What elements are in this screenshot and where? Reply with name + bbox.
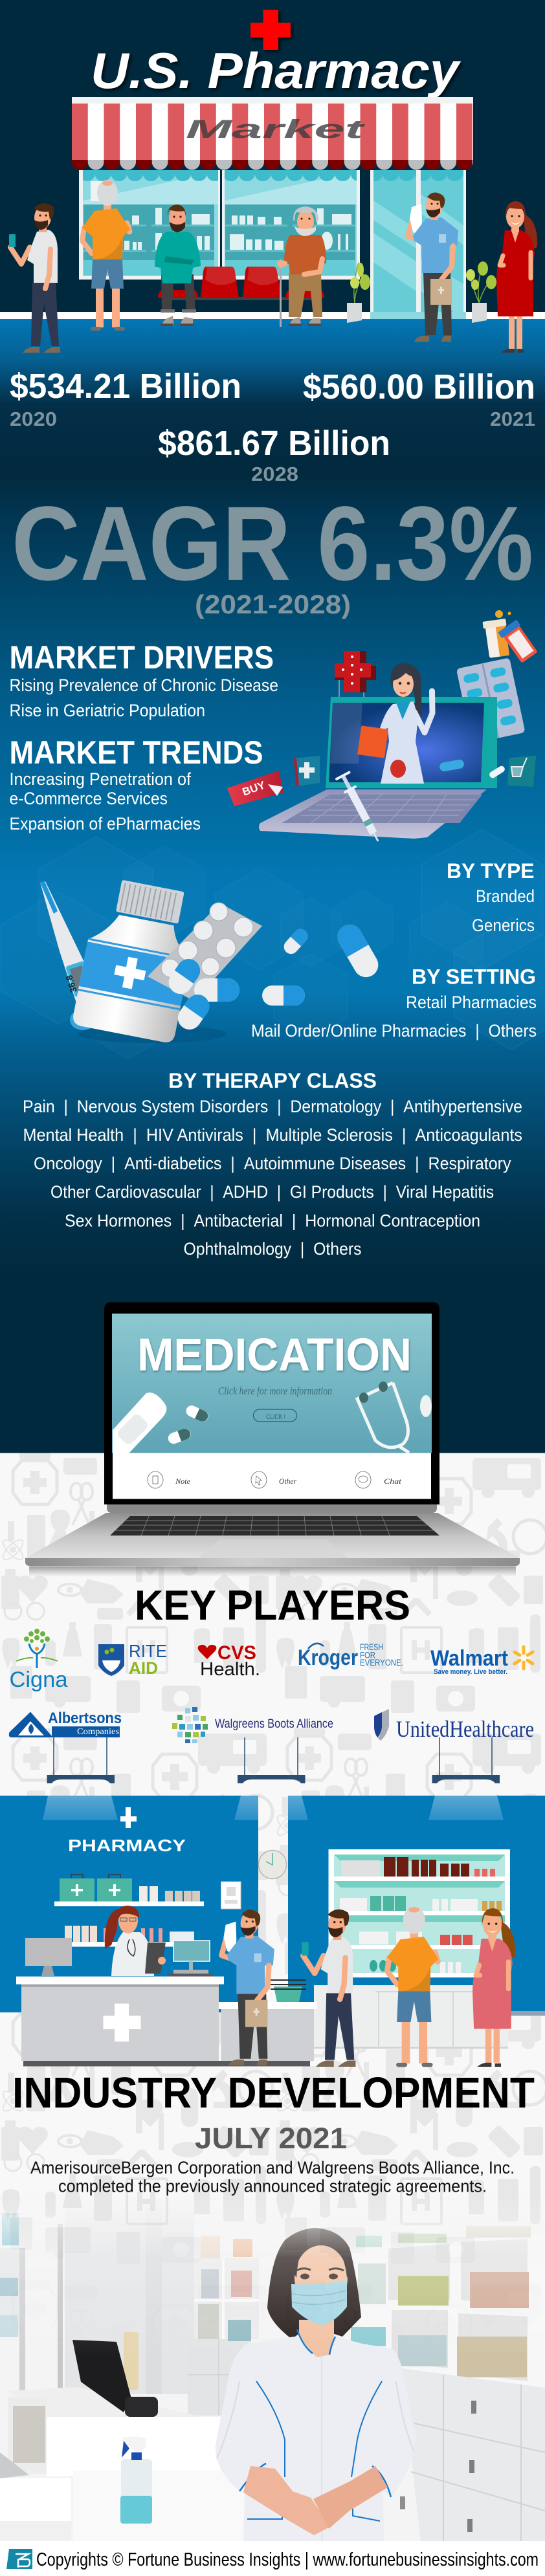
lower cabinets bbox=[314, 1985, 508, 2049]
striped awning bbox=[72, 97, 473, 171]
person: seated man in teal sweater bbox=[155, 204, 201, 326]
wall clock bbox=[259, 1851, 286, 1879]
doctor figure bbox=[357, 663, 432, 784]
market size 2021: $560.00 Billion bbox=[303, 368, 535, 406]
person: old woman seen from behind bbox=[82, 180, 130, 331]
blister strip bbox=[148, 903, 262, 1001]
by therapy class block bbox=[23, 1069, 522, 1259]
icon: shopping cart card bbox=[507, 756, 536, 787]
centre shelves bbox=[194, 2236, 259, 2341]
buy tag: BUY bbox=[241, 778, 267, 798]
laptop with medication page bbox=[25, 1302, 520, 1577]
potted plant left bbox=[347, 263, 370, 323]
market size 2028 bbox=[158, 424, 390, 485]
icon: red cross bbox=[250, 10, 291, 50]
logo: Rite Aid: AID bbox=[129, 1658, 158, 1678]
logo: Kroger: Kroger bbox=[298, 1646, 358, 1670]
icon: bottles bbox=[482, 610, 539, 665]
back wall and cabinet bbox=[65, 2225, 250, 2416]
person: man with phone bbox=[9, 203, 60, 353]
nav: chat: Chat bbox=[384, 1477, 402, 1486]
date: JULY 2021 bbox=[195, 2122, 347, 2155]
customer: man with bottle bbox=[302, 1910, 355, 2067]
pills on screen bbox=[166, 1404, 210, 1446]
pills group bbox=[164, 920, 383, 1034]
potted plant right bbox=[466, 261, 496, 323]
nav: note bbox=[148, 1471, 191, 1488]
pharmacy sign text: PHARMACY bbox=[68, 1836, 186, 1855]
market size 2020 bbox=[10, 367, 241, 430]
pharmacy plus sign bbox=[120, 1807, 137, 1828]
lower wall shelf bbox=[65, 1926, 194, 1946]
logo: Kroger: FOR bbox=[360, 1650, 375, 1660]
back of hair bbox=[267, 2228, 361, 2339]
online doctor laptop illustration bbox=[227, 610, 539, 845]
buy tag bbox=[227, 771, 284, 806]
market trends block: Expansion of ePharmacies bbox=[9, 814, 201, 833]
thermometer bbox=[40, 881, 96, 1030]
pharmacist woman bbox=[216, 2228, 416, 2541]
blue wall right bbox=[288, 1796, 545, 2016]
laptop screen bbox=[112, 1314, 432, 1499]
customer: woman in pink dress bbox=[473, 1908, 515, 2067]
pharmacist bbox=[105, 1906, 166, 1976]
icon: neon cross sign bbox=[335, 651, 376, 699]
by therapy class block: BY THERAPY CLASS bbox=[168, 1069, 377, 1092]
logo: CVS Health: Health. bbox=[200, 1659, 260, 1680]
icon: blister pack bbox=[456, 657, 526, 743]
customer: old woman bbox=[387, 1906, 438, 2067]
script tagline: Click here for more information bbox=[218, 1385, 332, 1397]
logo: Walmart bbox=[430, 1646, 533, 1676]
logo: Walmart: Walmart bbox=[430, 1646, 508, 1671]
logo: Rite Aid: RITE bbox=[129, 1641, 167, 1661]
development description: completed the previously announced strategic agreements. bbox=[58, 2177, 487, 2196]
medical icon pattern background bbox=[0, 1453, 545, 2553]
person: old man with cane bbox=[277, 206, 326, 327]
market sign text: Market bbox=[186, 115, 366, 144]
market trends block: Increasing Penetration of bbox=[9, 769, 191, 789]
medication heading: MEDICATION bbox=[137, 1330, 412, 1381]
glass shelving unit bbox=[329, 1849, 510, 1977]
market size 2028: $861.67 Billion bbox=[158, 424, 390, 463]
logo: Kroger bbox=[298, 1642, 403, 1670]
market trends block bbox=[9, 734, 263, 833]
footer band bbox=[0, 2541, 545, 2576]
face bbox=[295, 2245, 348, 2284]
market drivers block: MARKET DRIVERS bbox=[9, 639, 274, 676]
by type block: Generics bbox=[472, 916, 535, 935]
logo: CVS Health: CVS bbox=[217, 1642, 256, 1664]
person: pregnant woman in red dress bbox=[496, 201, 537, 353]
laptop lid bbox=[104, 1302, 439, 1504]
lamp light beams bbox=[43, 1796, 504, 1820]
logo: CVS Health bbox=[198, 1642, 260, 1680]
logo: Albertsons: Albertsons bbox=[48, 1710, 122, 1727]
person: man in blue shirt with prescription bbox=[408, 192, 458, 342]
by therapy class block: Mental Health | HIV Antivirals | Multiple Sclerosis | Anticoagulants bbox=[23, 1125, 522, 1145]
logo: Albertsons bbox=[9, 1710, 122, 1737]
cash register bbox=[168, 1941, 214, 1978]
logo: Cigna bbox=[9, 1629, 68, 1692]
hands bbox=[243, 2466, 330, 2535]
market size 2021 bbox=[303, 368, 535, 430]
market trends block: MARKET TRENDS bbox=[9, 734, 263, 771]
blue wall left bbox=[0, 1796, 258, 2012]
thermometer: 36.8 bbox=[63, 974, 79, 994]
nav: chat bbox=[355, 1471, 402, 1488]
pharmacy interior scene bbox=[0, 1796, 545, 2067]
bandage bbox=[113, 1393, 166, 1453]
footer logo bbox=[6, 2549, 32, 2569]
pendant lamp centre bbox=[238, 1737, 306, 1783]
decorative hexagon field bbox=[1, 830, 545, 1059]
right drawers bbox=[400, 2368, 545, 2541]
laptop deck bbox=[25, 1513, 520, 1577]
by type block: Branded bbox=[476, 886, 535, 906]
click button bbox=[254, 1409, 296, 1422]
logo: Walgreens Boots Alliance bbox=[172, 1707, 333, 1743]
stethoscope bbox=[357, 1382, 432, 1453]
logo: Rite Aid bbox=[98, 1641, 167, 1678]
by setting block bbox=[251, 965, 537, 1040]
shopping basket bbox=[271, 1980, 306, 2002]
by setting block: Retail Pharmacies bbox=[406, 993, 537, 1012]
right shelves bbox=[351, 2226, 531, 2381]
pendant lamp right bbox=[432, 1737, 500, 1783]
market drivers block: Rising Prevalence of Chronic Disease bbox=[9, 676, 278, 695]
waiting bench with chairs bbox=[158, 267, 324, 300]
title: U.S. Pharmacy bbox=[91, 42, 462, 99]
storefront bbox=[0, 97, 545, 319]
soft shadow bbox=[78, 1025, 227, 1043]
laptop hinge bbox=[107, 1504, 437, 1513]
market size 2021: 2021 bbox=[490, 408, 535, 430]
spray bottle bbox=[120, 2436, 152, 2524]
laptop keyboard bbox=[282, 795, 482, 823]
by therapy class block: Oncology | Anti-diabetics | Autoimmune Diseases | Respiratory bbox=[34, 1154, 511, 1173]
laptop screen bbox=[326, 697, 497, 788]
pharmacist photo bbox=[0, 2187, 545, 2541]
logo: UnitedHealthcare bbox=[374, 1709, 534, 1742]
market size 2020: $534.21 Billion bbox=[10, 367, 241, 406]
logo: Kroger: FRESH bbox=[360, 1642, 383, 1652]
shop windows bbox=[79, 170, 360, 280]
by type block bbox=[447, 859, 535, 935]
neck bbox=[299, 2320, 334, 2357]
by setting block: BY SETTING bbox=[412, 965, 536, 989]
white pill bbox=[488, 765, 506, 779]
coat bbox=[216, 2336, 416, 2541]
pharmacy door bbox=[370, 170, 466, 319]
nav: other: Other bbox=[279, 1477, 296, 1486]
logo: Kroger: EVERYONE. bbox=[360, 1657, 403, 1668]
mask bbox=[291, 2280, 347, 2325]
sidewalk kerb bbox=[0, 312, 545, 319]
blue pill bbox=[439, 759, 465, 772]
click button: CLICK ! bbox=[266, 1413, 285, 1421]
market size 2020: 2020 bbox=[10, 408, 57, 430]
page background gradient bbox=[0, 0, 545, 1453]
service counter bbox=[16, 1976, 317, 2066]
CAGR headline: (2021-2028) bbox=[195, 589, 351, 619]
left shelves bbox=[0, 2213, 63, 2390]
pendant lamp left bbox=[47, 1737, 115, 1783]
monitor and scanner bbox=[72, 2332, 158, 2417]
by therapy class block: Sex Hormones | Antibacterial | Hormonal Contraception bbox=[65, 1211, 480, 1231]
logo: Walgreens Boots Alliance: Walgreens Boots Alliance bbox=[215, 1717, 333, 1731]
wall poster bbox=[221, 1882, 241, 1909]
by type block: BY TYPE bbox=[447, 859, 535, 883]
medicine bottle and pills illustration bbox=[40, 875, 383, 1044]
laptop base bbox=[259, 789, 487, 839]
by therapy class block: Other Cardiovascular | ADHD | GI Products | Viral Hepatitis bbox=[50, 1182, 494, 1202]
market size 2028: 2028 bbox=[251, 463, 298, 485]
market drivers block bbox=[9, 639, 278, 720]
development description: AmerisourceBergen Corporation and Walgreens Boots Alliance, Inc. bbox=[30, 2158, 515, 2177]
bottle bbox=[72, 875, 202, 1044]
key players heading: KEY PLAYERS bbox=[135, 1581, 410, 1629]
icon: medical cross card bbox=[294, 756, 320, 786]
logo: Albertsons: Companies bbox=[77, 1727, 119, 1737]
upper wall shelf with kits bbox=[54, 1875, 204, 1906]
laptop keyboard bbox=[110, 1516, 439, 1536]
customer: man with prescription bbox=[221, 1910, 274, 2065]
market drivers block: Rise in Geriatric Population bbox=[9, 701, 205, 720]
nav: other bbox=[251, 1471, 296, 1488]
development description bbox=[30, 2158, 515, 2196]
by therapy class block: Ophthalmology | Others bbox=[184, 1239, 361, 1259]
counters bbox=[0, 2387, 221, 2521]
logo: Walmart: Save money. Live better. bbox=[434, 1668, 507, 1676]
logo: Cigna: Cigna bbox=[9, 1668, 68, 1692]
syringe bbox=[335, 771, 385, 845]
nav: note: Note bbox=[175, 1477, 191, 1486]
red end-call button bbox=[390, 760, 406, 778]
market trends block: e-Commerce Services bbox=[9, 789, 168, 808]
monitor bbox=[25, 1938, 72, 1976]
